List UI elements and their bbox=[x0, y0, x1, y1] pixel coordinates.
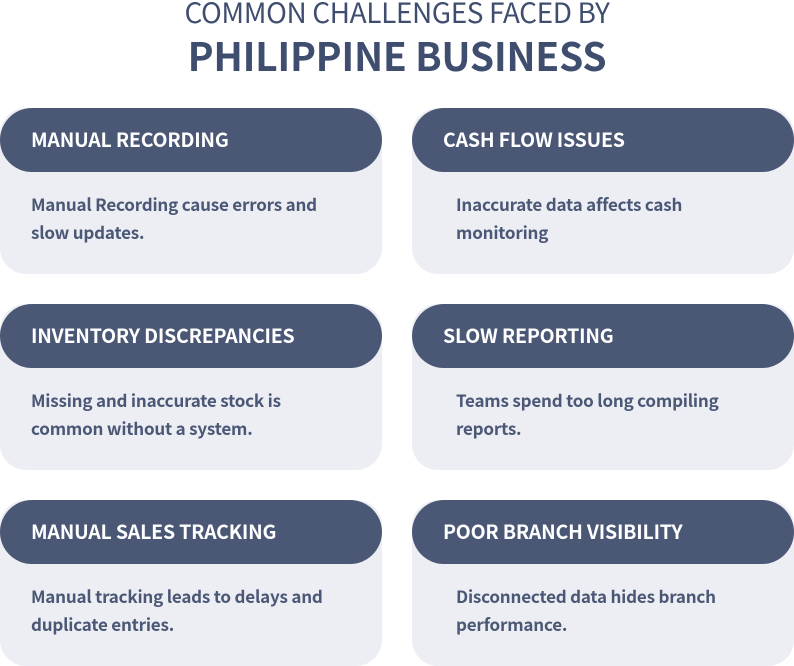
panel: manual sales tracking bbox=[0, 500, 382, 666]
body text: Disconnected data hides branch bbox=[456, 583, 716, 608]
header: INVENTORY DISCREPANCIES bbox=[31, 320, 295, 349]
body text: performance. bbox=[456, 611, 567, 636]
header bbox=[412, 500, 794, 564]
body text: monitoring bbox=[456, 219, 548, 244]
body text: duplicate entries. bbox=[31, 611, 174, 636]
header: CASH FLOW ISSUES bbox=[443, 124, 625, 153]
header: POOR BRANCH VISIBILITY bbox=[443, 516, 683, 545]
body text: Manual Recording cause errors and slow updates. bbox=[31, 191, 317, 244]
body text: Manual tracking leads to delays and bbox=[31, 583, 323, 608]
panel: cash flow issues bbox=[412, 108, 794, 274]
header: MANUAL SALES TRACKING bbox=[31, 516, 276, 545]
panel: poor branch visibility bbox=[412, 500, 794, 666]
subtitle heading: PHILIPPINE BUSINESS bbox=[188, 27, 606, 83]
header bbox=[412, 108, 794, 172]
panel: inventory discrepancies bbox=[0, 304, 382, 470]
panel: manual recording bbox=[0, 108, 382, 274]
header bbox=[0, 108, 382, 172]
body text: Missing and inaccurate stock is bbox=[31, 387, 281, 412]
body text bbox=[456, 583, 716, 636]
header: MANUAL RECORDING bbox=[31, 124, 229, 153]
header bbox=[0, 304, 382, 368]
header bbox=[0, 500, 382, 564]
body text bbox=[31, 387, 281, 440]
body text: common without a system. bbox=[31, 415, 253, 440]
body text bbox=[31, 583, 323, 636]
body text bbox=[456, 191, 682, 244]
body text: reports. bbox=[456, 415, 521, 440]
header bbox=[412, 304, 794, 368]
header: SLOW REPORTING bbox=[443, 320, 614, 349]
panel: slow reporting bbox=[412, 304, 794, 470]
body text: Inaccurate data affects cash bbox=[456, 191, 682, 216]
body text: Teams spend too long compiling bbox=[456, 387, 719, 412]
body text bbox=[456, 387, 719, 440]
